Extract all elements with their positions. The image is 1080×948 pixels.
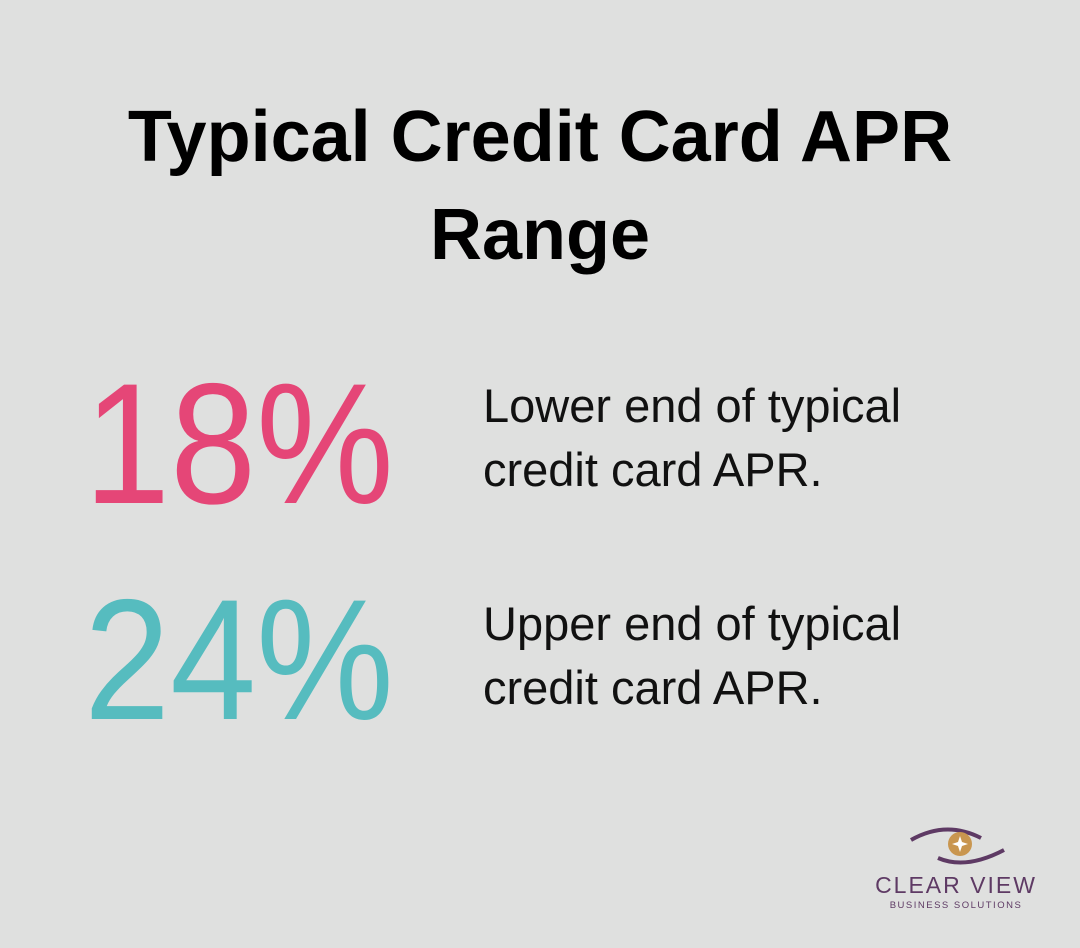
- text: upper end: credit card APR.: [483, 661, 823, 714]
- title: Range: [430, 195, 650, 275]
- text: upper end: Upper end of typical: [483, 597, 901, 650]
- text: lower end: [483, 379, 901, 496]
- text: lower end: Lower end of typical: [483, 379, 901, 432]
- icon: eye: [910, 828, 1005, 864]
- title: [128, 97, 952, 275]
- logo: [875, 828, 1037, 911]
- logo text: CLEAR VIEW: [875, 872, 1037, 898]
- text: upper end: [483, 597, 901, 714]
- text: lower end: credit card APR.: [483, 443, 823, 496]
- title: Typical Credit Card APR: [128, 97, 952, 177]
- stat: 18%: 18%: [84, 348, 394, 540]
- logo: BUSINESS SOLUTIONS: [890, 900, 1022, 911]
- stat: 24%: 24%: [84, 564, 394, 756]
